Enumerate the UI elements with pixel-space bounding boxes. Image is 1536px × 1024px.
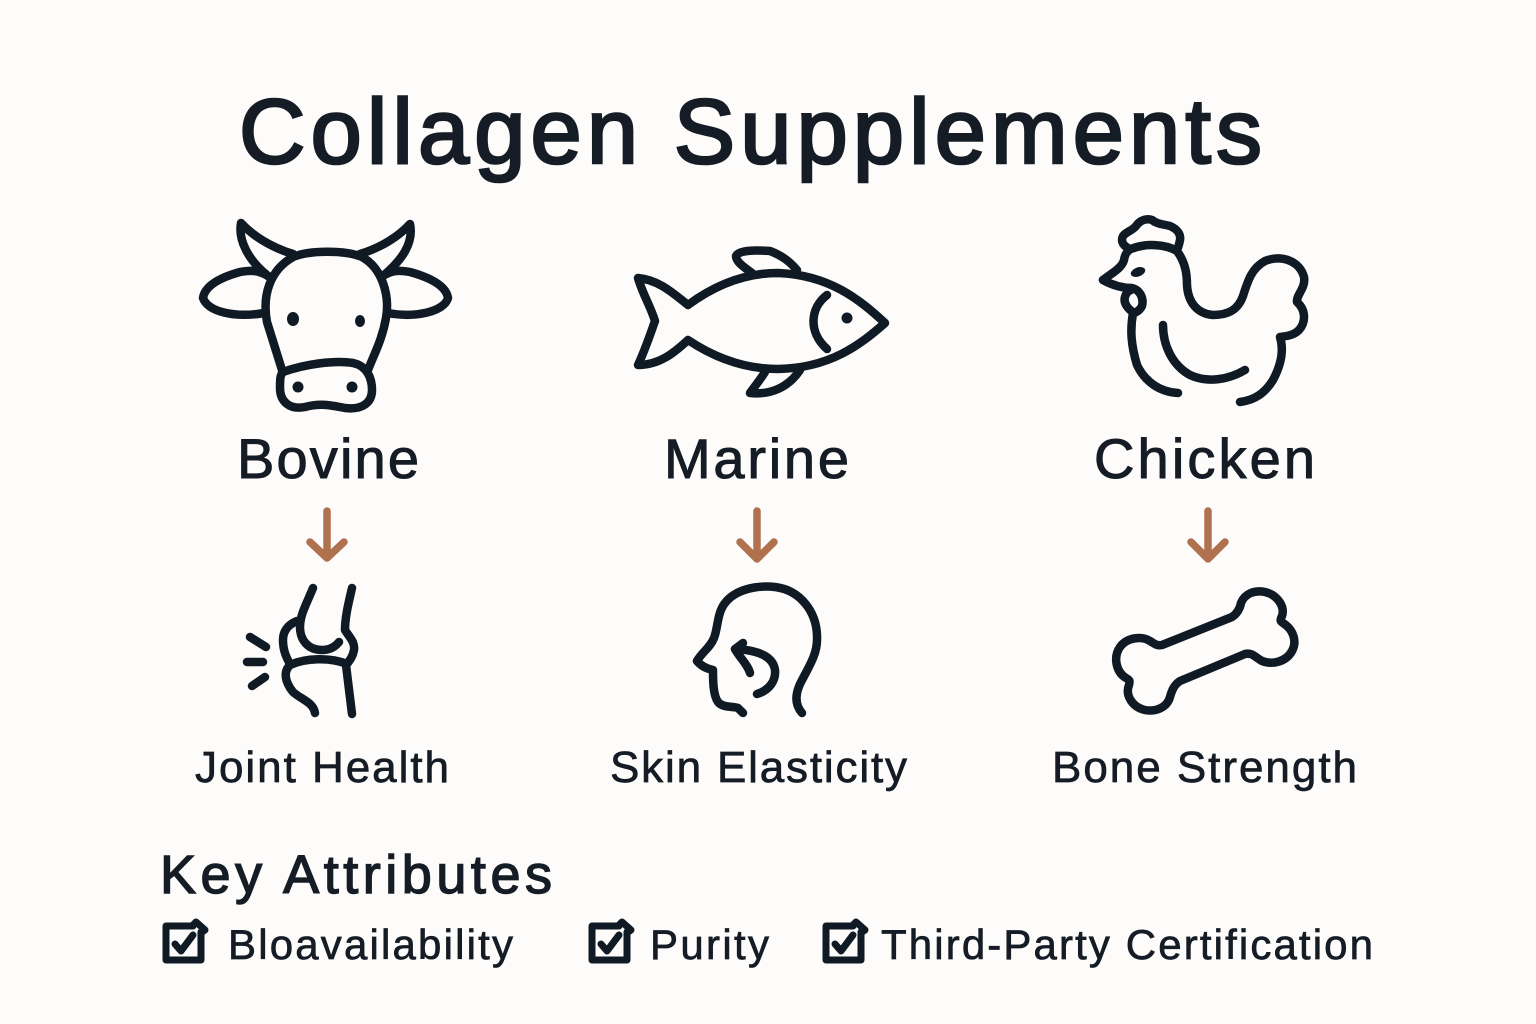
label: Bone Strength: Bone Strength: [1052, 743, 1357, 792]
label: Joint Health: Joint Health: [195, 743, 449, 792]
arrow: chicken to bone strength: [1191, 511, 1225, 559]
checkbox: Purity: [592, 922, 631, 960]
arrow: marine to skin elasticity: [740, 511, 774, 559]
icon: head profile with skin arrow: [697, 587, 817, 713]
icon: bone: [1116, 591, 1294, 710]
label: Bovine: Bovine: [237, 427, 419, 490]
label: Purity: Purity: [650, 921, 769, 968]
label: Chicken: Chicken: [1094, 427, 1315, 490]
label: Third-Party Certification: Third-Party Certification: [881, 921, 1373, 968]
label: Bloavailability: Bloavailability: [228, 921, 513, 968]
label: Marine: Marine: [664, 427, 849, 490]
icon: fish: [638, 251, 885, 393]
icon: knee joint: [247, 588, 354, 714]
checkbox: Bioavailability: [166, 922, 205, 960]
icon: chicken: [1103, 219, 1304, 402]
heading: Key Attributes: Key Attributes: [160, 845, 552, 905]
label: Skin Elasticity: Skin Elasticity: [610, 743, 907, 792]
checkbox: Third-Party Certification: [826, 922, 865, 960]
icon: cow head: [203, 223, 448, 408]
title: Collagen Supplements: [239, 81, 1262, 183]
arrow: bovine to joint health: [310, 511, 344, 558]
